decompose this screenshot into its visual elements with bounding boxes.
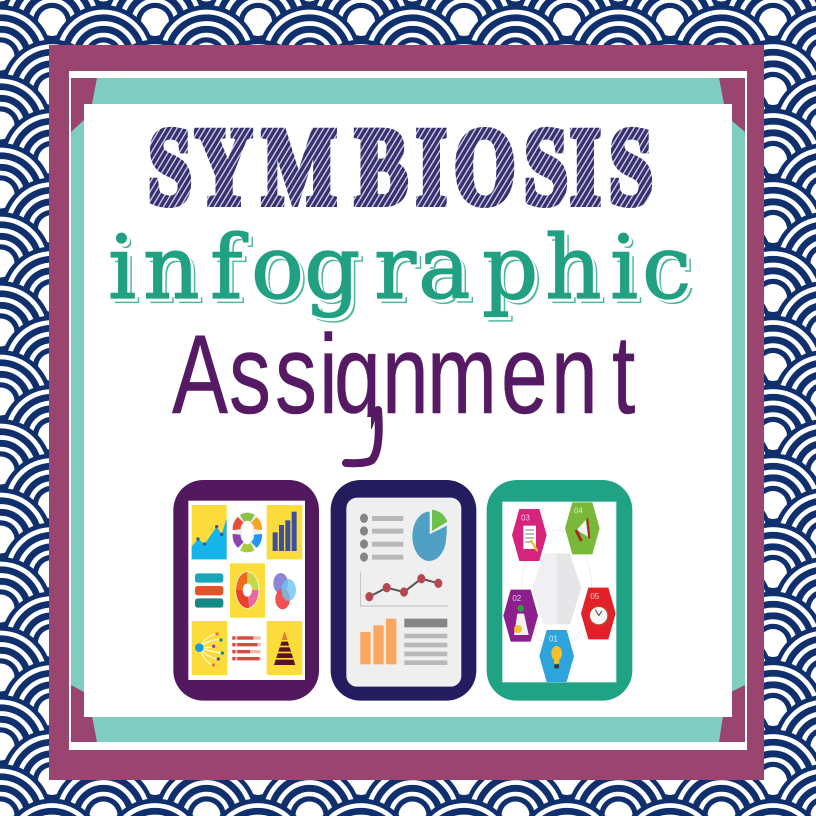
hexagon 01 (539, 630, 574, 682)
hexagon 02 (503, 590, 538, 642)
donut chart (235, 571, 259, 609)
hexagon 04 (565, 502, 600, 554)
area chart (192, 518, 227, 559)
pyramid (274, 632, 295, 665)
hexagon 04: 04 (574, 506, 583, 515)
hexagon 01: 01 (549, 634, 558, 643)
hexagon 05: 05 (590, 592, 600, 601)
centre hexagon (533, 553, 581, 624)
text lines (404, 619, 447, 665)
venn diagram (273, 573, 296, 609)
orange bars (360, 619, 396, 664)
heading: infographic: infographic (108, 216, 691, 319)
hexagon 02: 02 (512, 594, 522, 603)
heading: Assignment: Assignment (172, 311, 635, 437)
stacked pills (195, 573, 223, 608)
list bars (232, 636, 261, 660)
hexagon 03 (512, 509, 547, 561)
ring diagram (237, 517, 258, 548)
bullet list (360, 514, 403, 562)
tree diagram (195, 632, 224, 667)
panel: tablet with hexagon cycle (487, 480, 632, 701)
panel: tablet with report charts (331, 480, 476, 701)
hexagon 03: 03 (521, 514, 530, 523)
title: SYMBIOSIS: SYMBIOSIS (148, 106, 653, 228)
bar chart (273, 512, 297, 551)
pie chart (412, 510, 447, 561)
frame: purple, white line, teal and white panel (49, 45, 764, 780)
panel: tablet with yellow chart grid (173, 480, 319, 701)
line chart (360, 572, 448, 606)
hexagon 05 (581, 588, 616, 639)
